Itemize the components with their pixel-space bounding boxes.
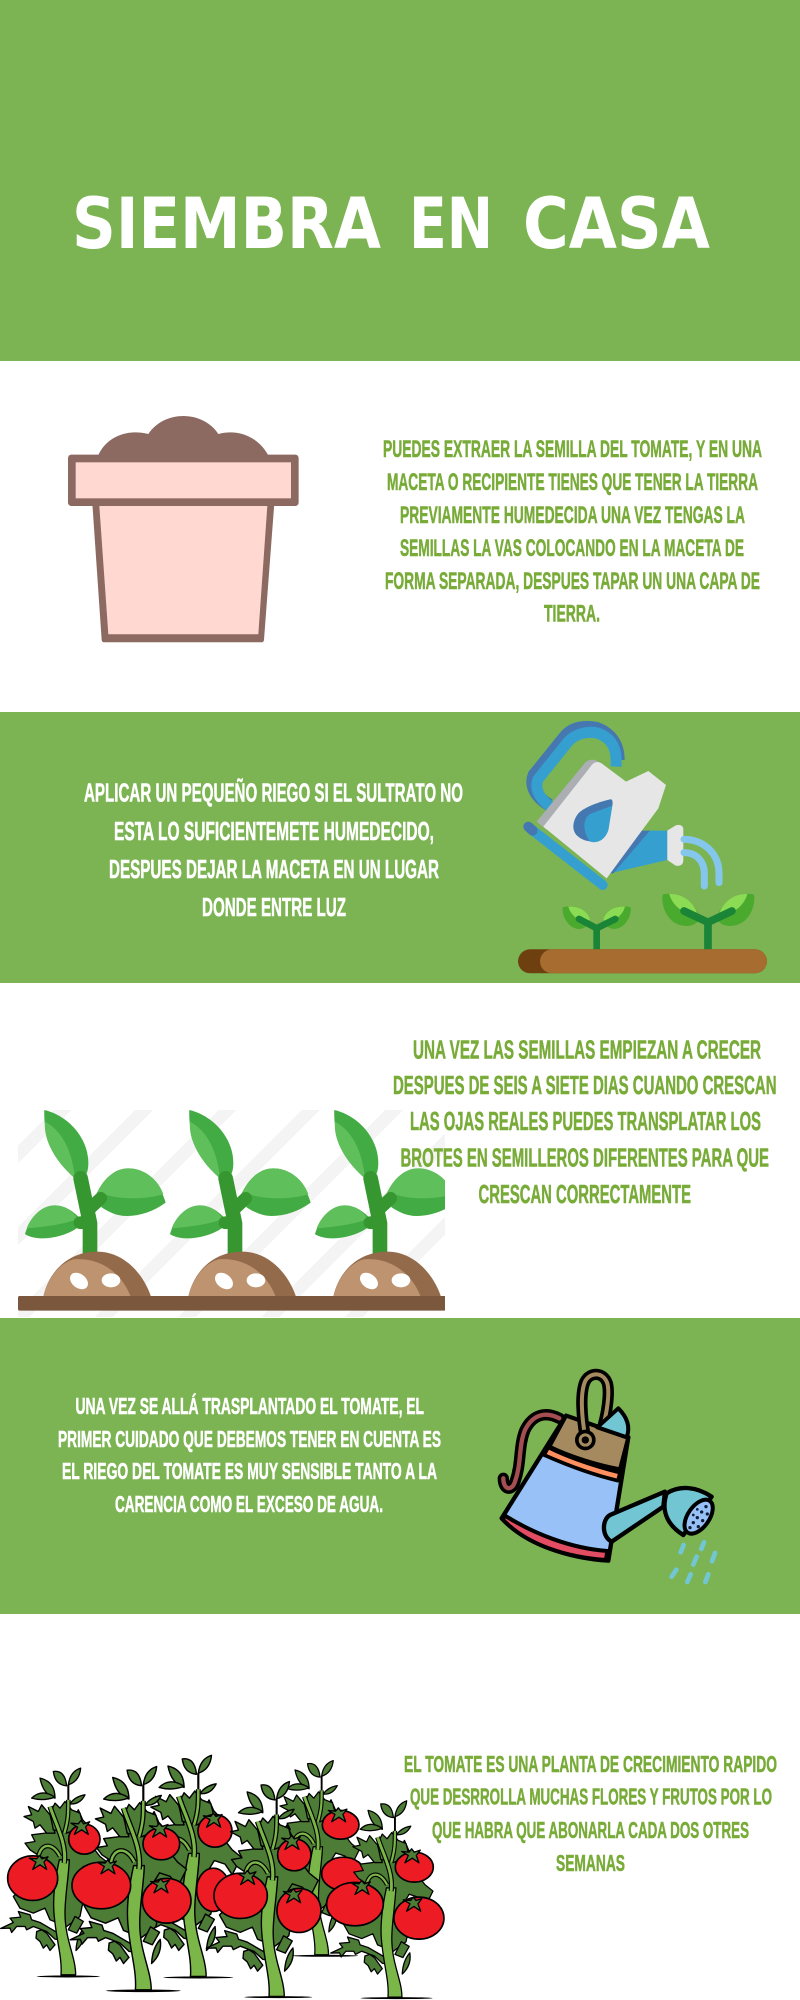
panel: step 2 band <box>0 712 800 983</box>
text block: step 4: CARENCIA COMO EL EXCESO DE AGUA. <box>115 1491 383 1517</box>
title: EN <box>409 183 493 265</box>
icon: outlined watering can <box>502 1374 718 1582</box>
title: CASA <box>523 183 710 265</box>
text block: step 2: APLICAR UN PEQUEÑO RIEGO SI EL SULTRATO NO <box>84 778 463 808</box>
icon: flower pot with soil <box>68 416 299 642</box>
text block: step 1: TIERRA. <box>544 600 600 628</box>
icon: watering can over sprouts <box>518 727 767 973</box>
title: SIEMBRA <box>72 183 381 265</box>
text block: step 2: ESTA LO SUFICIENTEMETE HUMEDECIDO, <box>114 816 434 846</box>
text block: step 1 <box>383 436 762 628</box>
text block: step 4: UNA VEZ SE ALLÁ TRASPLANTADO EL TOMATE, EL <box>76 1392 424 1419</box>
text block: step 4 <box>58 1392 441 1517</box>
text block: step 4: PRIMER CUIDADO QUE DEBEMOS TENER EN CUENTA ES <box>58 1426 441 1452</box>
panel: step 4 band <box>0 1318 800 1614</box>
text block: step 4: EL RIEGO DEL TOMATE ES MUY SENSIBLE TANTO A LA <box>62 1458 437 1484</box>
illustration: tomato plants <box>1 1755 444 1999</box>
text block: step 3 continued <box>400 1142 769 1209</box>
stem of back plants <box>126 1755 241 1976</box>
icon: row of seedlings <box>18 1110 445 1317</box>
text block: step 5 <box>404 1751 777 1876</box>
text block: step 3 <box>393 1034 776 1136</box>
panel: title band <box>0 0 800 361</box>
text block: step 2: DESPUES DEJAR LA MACETA EN UN LUGAR <box>109 854 439 884</box>
text block: step 2: DONDE ENTRE LUZ <box>202 892 346 922</box>
text block: step 2 <box>84 778 463 922</box>
text block: step 5: SEMANAS <box>556 1850 625 1876</box>
title <box>72 183 710 265</box>
